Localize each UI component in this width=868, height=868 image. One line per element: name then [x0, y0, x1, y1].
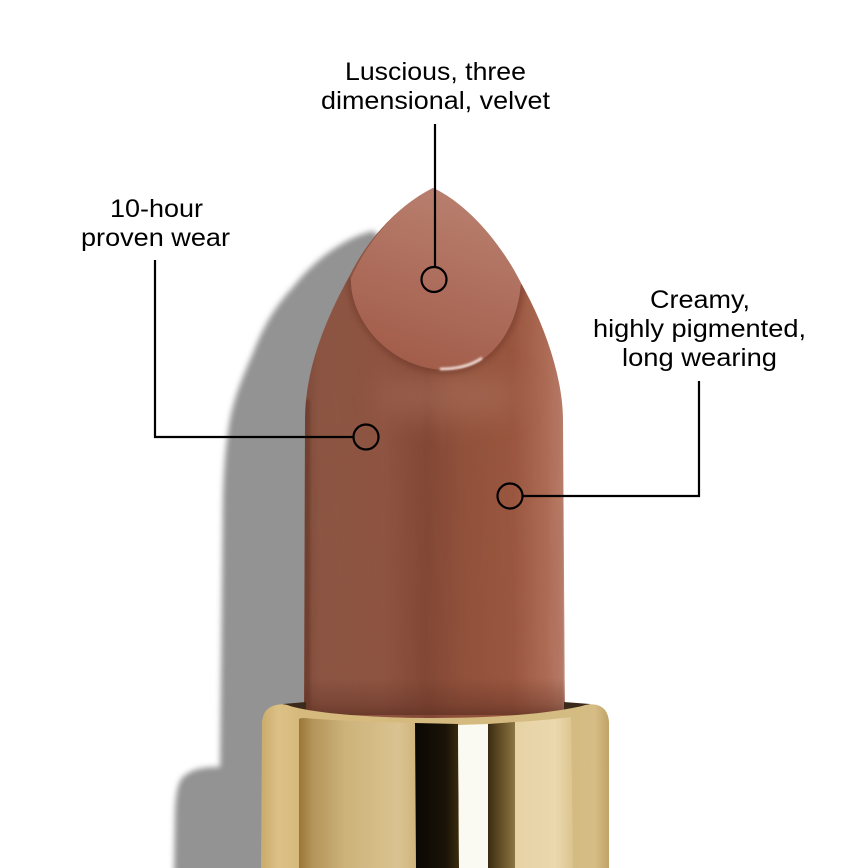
- tube dark reflection: [415, 723, 459, 868]
- callout: proven wear: [81, 195, 378, 450]
- callout text: [321, 58, 550, 115]
- callout: creamy pigmented: [498, 286, 806, 508]
- callout text: [81, 195, 230, 252]
- callout text: highly pigmented,: [593, 315, 806, 343]
- leader line and marker: [422, 124, 446, 292]
- callout text: [593, 286, 806, 372]
- callout text: proven wear: [81, 224, 230, 252]
- lipstick: [300, 185, 570, 725]
- gold tube: [261, 702, 609, 868]
- callout text: 10-hour: [110, 195, 203, 223]
- cast shadow of lipstick: [174, 231, 385, 868]
- leader line and marker: [498, 381, 699, 508]
- tube white reflection: [458, 724, 488, 868]
- callout text: dimensional, velvet: [321, 87, 550, 115]
- tube brown reflection: [488, 722, 515, 868]
- tube right panel: [515, 717, 573, 868]
- tube left panel: [299, 718, 416, 868]
- callout text: Luscious, three: [345, 58, 526, 86]
- tube body: [261, 704, 609, 868]
- leader line and marker: [155, 260, 378, 450]
- tube inner rim: [283, 702, 590, 714]
- lipstick bullet body: [300, 185, 570, 725]
- tip highlight: [440, 358, 482, 369]
- lipstick slanted tip facet: [351, 188, 521, 370]
- callout text: long wearing: [622, 344, 777, 372]
- callout: luscious velvet: [321, 58, 550, 292]
- callout text: Creamy,: [650, 286, 750, 314]
